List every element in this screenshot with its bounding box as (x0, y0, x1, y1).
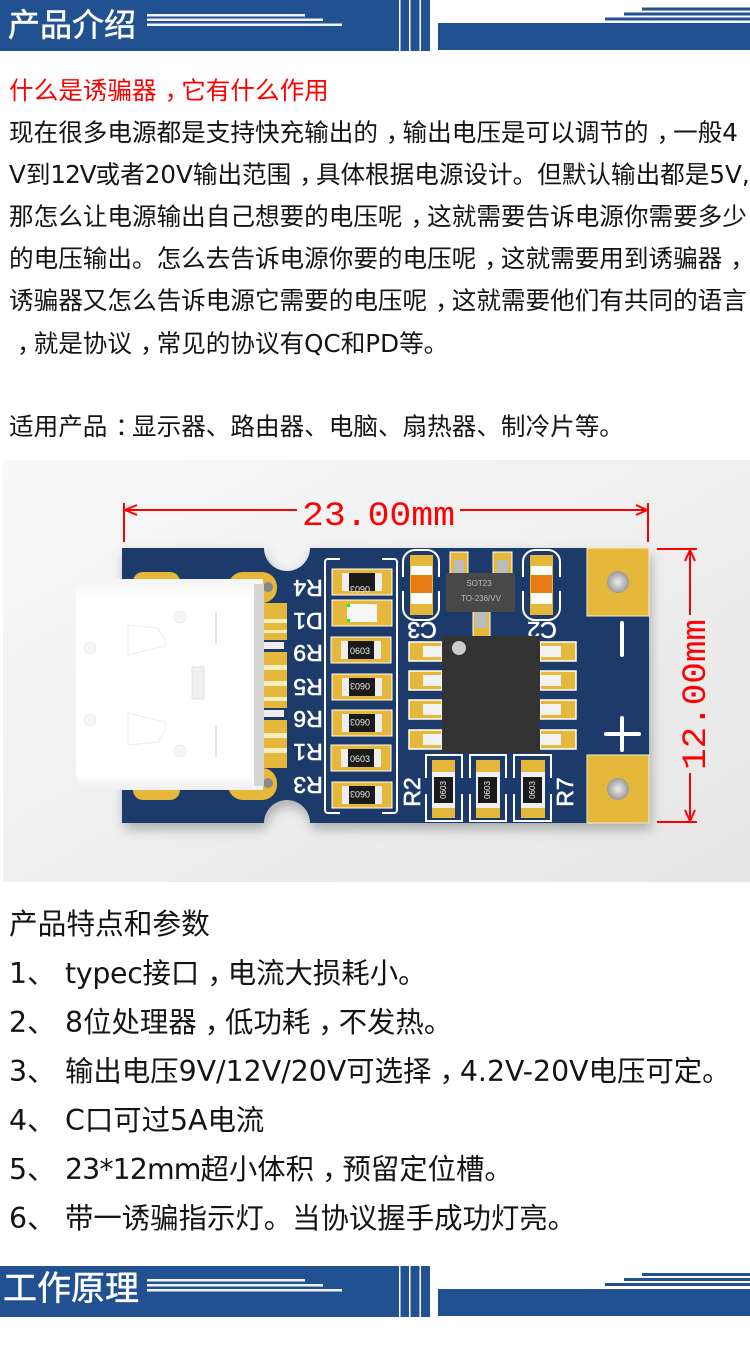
silkscreen labels: R7 (552, 777, 578, 807)
feature 6: 6、 (9, 1202, 55, 1235)
feature 2: 8位处理器 ，低功耗 ，不发热。 (65, 1006, 452, 1039)
width dimension (124, 503, 648, 542)
intro paragraph: 现在很多电源都是支持快充输出的 ，输出电压是可以调节的 ，一般4 (9, 118, 738, 147)
intro paragraph: 那怎么让电源输出自己想要的电压呢 ，这就需要告诉电源你需要多少 (9, 202, 747, 231)
feature 3: 3、 (9, 1055, 55, 1088)
product board diagram (3, 460, 750, 882)
PCB (76, 548, 649, 823)
IC pins (409, 642, 576, 749)
feature 2: 2、 (9, 1006, 55, 1039)
intro paragraph: V到12V或者20V输出范围 ，具体根据电源设计。但默认输出都是5V, (9, 160, 750, 189)
silkscreen labels: R1 (293, 739, 323, 765)
resistor column (331, 569, 392, 808)
IC chip (442, 636, 540, 753)
capacitors (400, 550, 563, 620)
SOT23 regulator (446, 552, 515, 638)
SOT23 regulator: TO-236/VV (461, 594, 502, 603)
intro paragraph: ，就是协议 ，常见的协议有QC和PD等。 (17, 329, 448, 358)
silkscreen labels: R4 (293, 575, 323, 601)
feature 1: typec接口 ，电流大损耗小。 (65, 957, 426, 990)
lower resistors: 0603 (439, 781, 448, 799)
lower resistors (424, 755, 553, 821)
intro heading: 什么是诱骗器 ，它有什么作用 (9, 76, 329, 105)
polarity marks (606, 623, 639, 750)
resistor column: 0603 (350, 681, 370, 691)
resistor column: 0603 (350, 754, 370, 764)
silkscreen labels: R6 (293, 706, 323, 732)
silkscreen labels: C3 (407, 617, 437, 643)
resistor column: 0603 (350, 646, 370, 656)
intro paragraph (9, 118, 750, 358)
resistor outline (325, 559, 397, 813)
lower resistors: 0603 (528, 781, 537, 799)
lower resistors: 0603 (483, 781, 492, 799)
terminal pads (587, 548, 649, 823)
header banner: 工作原理: 工作原理 (3, 1270, 139, 1308)
intro paragraph: 的电压输出。怎么去告诉电源你要的电压呢 ，这就需要用到诱骗器 ， (9, 244, 750, 273)
product board diagram: 23.00mm (302, 498, 455, 536)
features heading: 产品特点和参数 (9, 907, 210, 941)
silkscreen labels: R2 (399, 777, 425, 807)
intro paragraph: 诱骗器又怎么告诉电源它需要的电压呢 ，这就需要他们有共同的语言 (9, 286, 747, 315)
header banner: 工作原理 (0, 1266, 750, 1317)
resistor column: 0603 (350, 789, 370, 799)
height dimension (657, 549, 697, 822)
feature 4: C口可过5A电流 (65, 1104, 264, 1137)
feature 1: 1、 (9, 957, 55, 990)
USB-C connector (76, 579, 273, 790)
header banner: 产品介绍: 产品介绍 (8, 7, 136, 43)
connector pads (133, 572, 287, 800)
silkscreen labels: R5 (293, 674, 323, 700)
header banner: 产品介绍 (0, 0, 750, 51)
silkscreen labels: R9 (293, 640, 323, 666)
feature 4: 4、 (9, 1104, 55, 1137)
feature 5: 23*12mm超小体积 ，预留定位槽。 (65, 1153, 513, 1186)
feature 5: 5、 (9, 1153, 55, 1186)
silkscreen labels (293, 575, 578, 807)
SOT23 regulator: SOT23 (466, 579, 492, 588)
silkscreen labels: R3 (293, 772, 323, 798)
resistor column: 0603 (350, 584, 370, 594)
feature 3: 输出电压9V/12V/20V可选择 ，4.2V-20V电压可定。 (65, 1055, 731, 1088)
applicable products: 适用产品 ：显示器、路由器、电脑、扇热器、制冷片等。 (9, 412, 624, 441)
feature list (9, 957, 731, 1235)
silkscreen labels: D1 (293, 608, 323, 634)
resistor column: 0603 (350, 717, 370, 727)
feature 6: 带一诱骗指示灯。当协议握手成功灯亮。 (65, 1202, 576, 1235)
product board diagram: 12.00mm (678, 619, 716, 770)
silkscreen labels: C2 (527, 617, 557, 643)
